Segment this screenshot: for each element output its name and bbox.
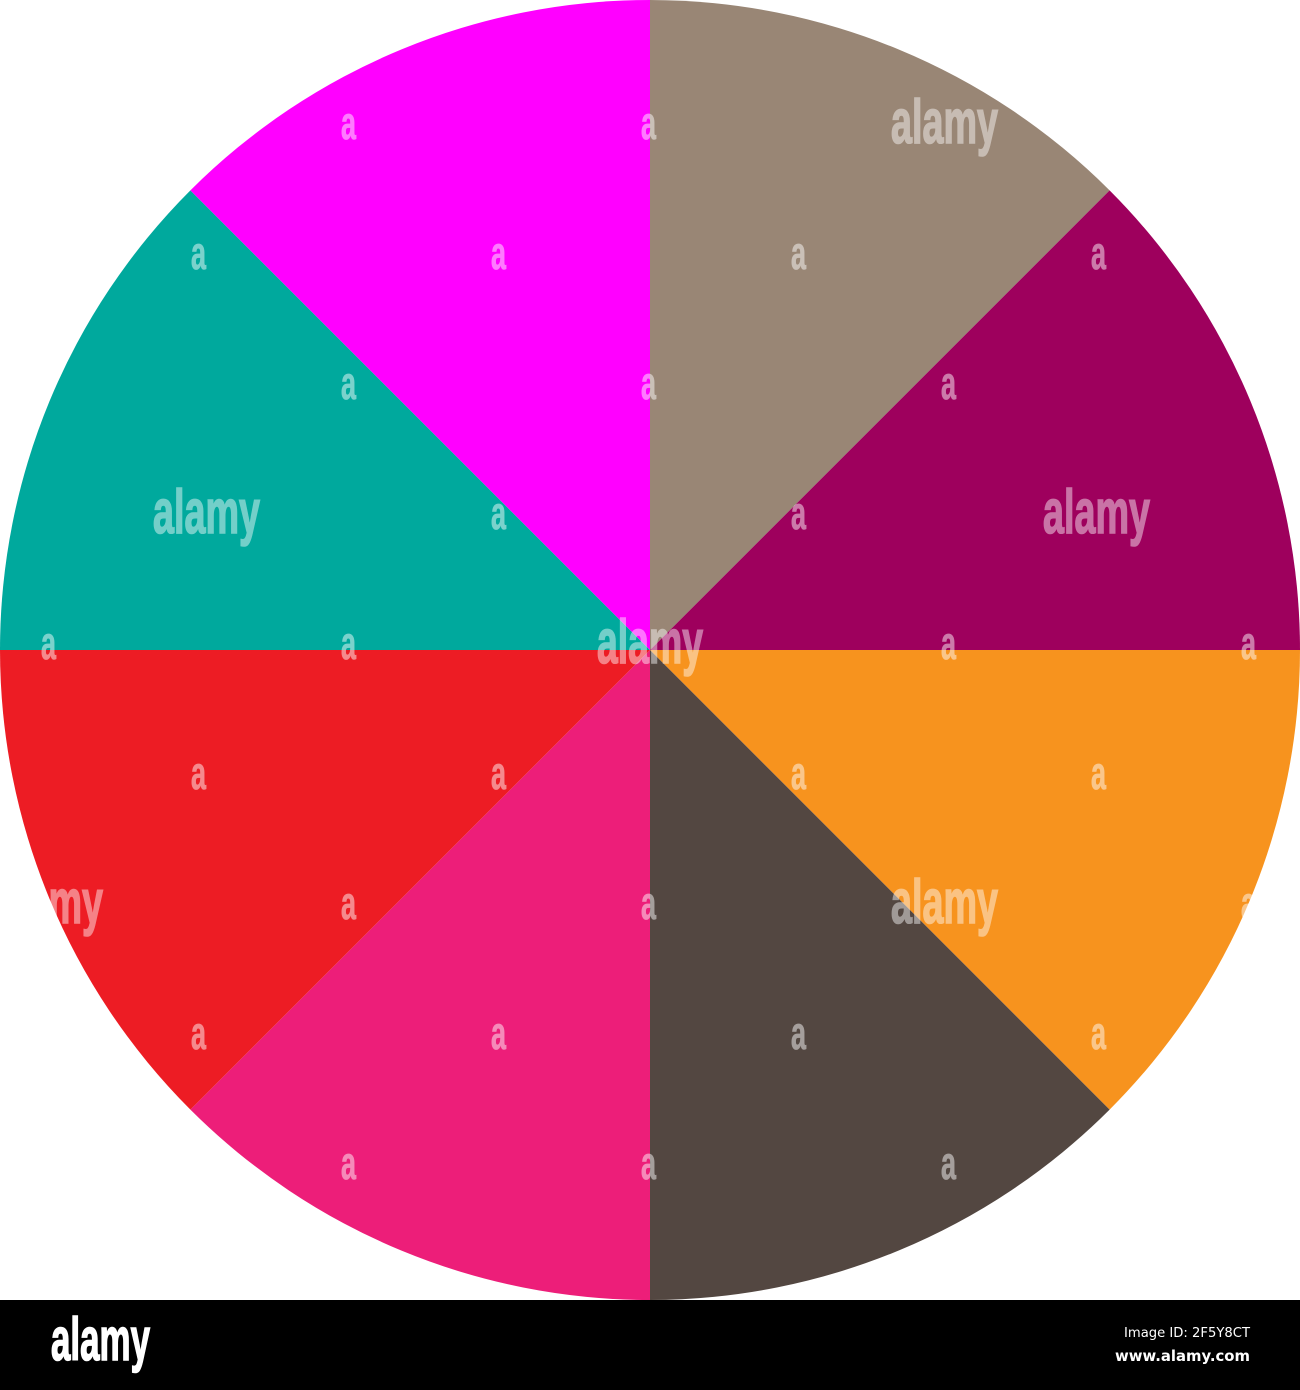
segment: bright magenta bbox=[190, 0, 650, 650]
watermark: small repeated letters: a bbox=[941, 617, 956, 669]
watermark: small repeated letters: a bbox=[791, 227, 806, 279]
watermark: small repeated letters: a bbox=[641, 1137, 656, 1189]
watermark: large repeated logo text: alamy bbox=[597, 608, 703, 677]
segment: dark brown bbox=[650, 650, 1110, 1300]
watermark: small repeated letters: a bbox=[341, 617, 356, 669]
watermark: small repeated letters: a bbox=[1091, 1007, 1106, 1059]
watermark: small repeated letters: a bbox=[491, 1007, 506, 1059]
watermark: small repeated letters: a bbox=[1091, 227, 1106, 279]
watermark: small repeated letters: a bbox=[1091, 747, 1106, 799]
watermark: small repeated letters: a bbox=[641, 97, 656, 149]
footer logo: alamy bbox=[51, 1306, 150, 1373]
watermark: small repeated letters: a bbox=[641, 877, 656, 929]
watermark: small repeated letters: a bbox=[191, 747, 206, 799]
image ID: Image ID: 2F5Y8CT bbox=[1124, 1325, 1251, 1341]
watermark: large repeated logo text: alamy bbox=[153, 478, 260, 547]
watermark: small repeated letters: a bbox=[341, 357, 356, 409]
watermark: small repeated letters bbox=[41, 97, 1256, 1189]
watermark: large repeated logo text: alamy bbox=[891, 868, 998, 937]
website address: www.alamy.com bbox=[1115, 1347, 1250, 1365]
watermark: small repeated letters: a bbox=[491, 487, 506, 539]
watermark: small repeated letters: a bbox=[941, 1137, 956, 1189]
watermark: small repeated letters: a bbox=[491, 227, 506, 279]
watermark: small repeated letters: a bbox=[341, 1137, 356, 1189]
watermark: small repeated letters: a bbox=[791, 747, 806, 799]
watermark: small repeated letters: a bbox=[791, 1007, 806, 1059]
segment: pink bbox=[190, 650, 650, 1300]
watermark: small repeated letters: a bbox=[491, 747, 506, 799]
watermark: small repeated letters: a bbox=[341, 97, 356, 149]
watermark: large repeated logo text: alamy bbox=[1043, 478, 1150, 547]
watermark: small repeated letters: a bbox=[941, 357, 956, 409]
watermark: large repeated logo text: alamy bbox=[891, 88, 998, 157]
segment: teal bbox=[0, 190, 650, 650]
watermark: small repeated letters: a bbox=[791, 487, 806, 539]
segment: orange bbox=[650, 650, 1300, 1110]
watermark: small repeated letters: a bbox=[191, 227, 206, 279]
watermark: small repeated letters: a bbox=[191, 1007, 206, 1059]
watermark: small repeated letters: a bbox=[41, 617, 56, 669]
watermark: small repeated letters: a bbox=[641, 357, 656, 409]
segment: taupe bbox=[650, 0, 1110, 650]
watermark: small repeated letters: a bbox=[1241, 617, 1256, 669]
watermark: large repeated logo text bbox=[0, 88, 1150, 937]
watermark: large repeated logo text: alamy bbox=[0, 868, 103, 937]
segment: red bbox=[0, 650, 650, 1110]
segment: dark magenta bbox=[650, 190, 1300, 650]
watermark: small repeated letters: a bbox=[1241, 877, 1256, 929]
watermark: small repeated letters: a bbox=[341, 877, 356, 929]
footer bar bbox=[0, 1300, 1300, 1390]
